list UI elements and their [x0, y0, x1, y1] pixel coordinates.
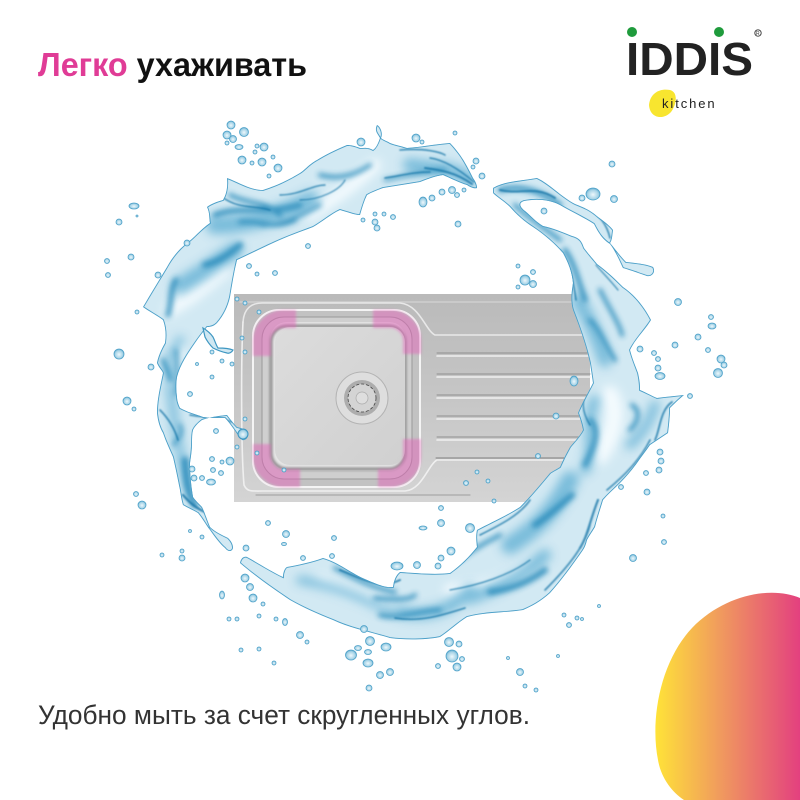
bowl floor — [275, 327, 405, 465]
sink plate — [234, 294, 590, 502]
logo: IDDIS kitchen: IDDIS — [626, 33, 753, 85]
water splash: top-left arc and left stream — [143, 125, 477, 551]
side branch of the stream — [203, 328, 233, 353]
logo: IDDIS kitchen — [626, 27, 761, 117]
gradient blob — [655, 593, 800, 800]
logo: IDDIS kitchen: R — [756, 31, 760, 37]
pink rounded corners — [262, 319, 412, 478]
stream tail droplet — [238, 429, 248, 439]
logo: IDDIS kitchen: kitchen — [662, 96, 716, 111]
water droplets — [104, 121, 727, 692]
sink — [234, 294, 590, 502]
drainer grooves — [240, 302, 590, 495]
water splash: right and bottom arc — [235, 170, 690, 645]
sink bowl — [253, 310, 420, 487]
title: Легко ухаживать — [38, 46, 307, 83]
caption: Удобно мыть за счет скругленных углов. — [38, 700, 530, 730]
drain — [336, 372, 388, 424]
